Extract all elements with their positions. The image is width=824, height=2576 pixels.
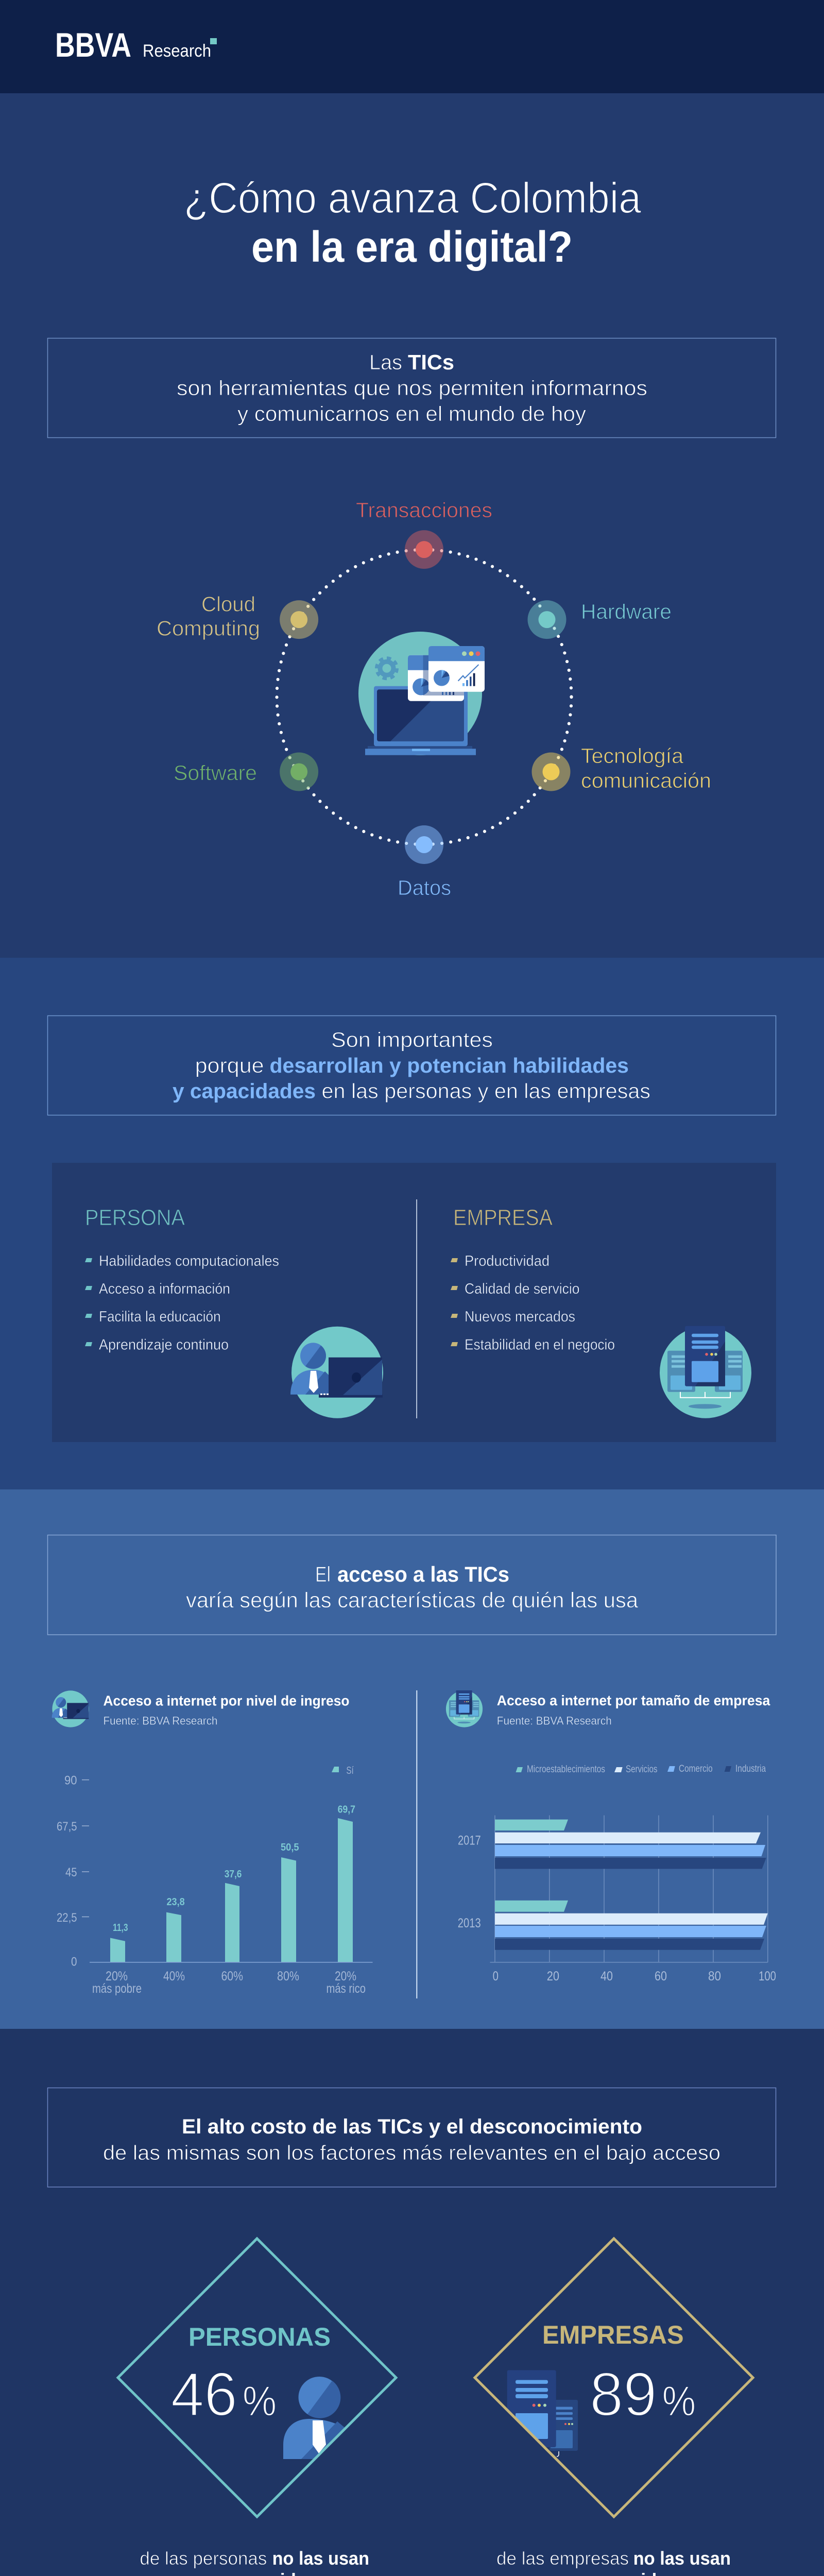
title: ¿Cómo avanza Colombia bbox=[184, 174, 641, 222]
callout: Las TICs: y comunicarnos en el mundo de hoy bbox=[237, 402, 587, 426]
grid bbox=[490, 1816, 768, 1962]
node: Cloud Computing: Cloud bbox=[201, 592, 255, 616]
chart heading bbox=[103, 1693, 349, 1727]
axis labels: 2013 bbox=[458, 1916, 481, 1930]
stat: 46%: 46 bbox=[171, 2360, 237, 2429]
stat: 89% bbox=[590, 2360, 696, 2429]
chart: acceso por nivel de ingreso bbox=[52, 1690, 373, 1996]
section: alto costo bbox=[0, 2029, 824, 2576]
list: empresa bbox=[451, 1205, 615, 1353]
axis labels: 2017 bbox=[458, 1834, 481, 1848]
value labels: 11,3 bbox=[113, 1922, 128, 1934]
axis labels: 20 bbox=[547, 1969, 559, 1984]
chart: acceso por tamaño de empresa bbox=[446, 1690, 776, 1984]
diagram: TIC components ring bbox=[157, 498, 711, 900]
list: persona: Aprendizaje continuo bbox=[99, 1336, 229, 1353]
chart heading: Acceso a internet por tamaño de empresa bbox=[497, 1692, 770, 1708]
list: persona: Habilidades computacionales bbox=[99, 1253, 279, 1269]
list: persona: Facilita la educación bbox=[99, 1309, 221, 1325]
text: empresas: no las usan bbox=[633, 2548, 731, 2569]
logo: BBVA Research: Research bbox=[143, 41, 211, 61]
node: Cloud Computing bbox=[157, 592, 318, 640]
stat: 46% bbox=[171, 2360, 277, 2429]
section: intro TICs bbox=[0, 93, 824, 958]
y axis: 45 bbox=[65, 1866, 77, 1879]
list: persona: Acceso a información bbox=[99, 1281, 230, 1297]
axis labels bbox=[458, 1834, 776, 1984]
y axis: 0 bbox=[71, 1955, 77, 1969]
panel: persona y empresa bbox=[52, 1163, 776, 1442]
list: empresa: Productividad bbox=[465, 1253, 550, 1269]
value labels: 69,7 bbox=[338, 1804, 355, 1815]
stat: 89%: % bbox=[662, 2378, 696, 2425]
node: Cloud Computing: Computing bbox=[157, 617, 260, 640]
callout: alto costo bbox=[47, 2088, 776, 2187]
icon: servidor empresa bbox=[660, 1326, 751, 1418]
legend: Comercio bbox=[679, 1764, 713, 1774]
callout: El acceso a las TICs: varía según las características de quién las usa bbox=[186, 1588, 639, 1612]
list: empresa: Estabilidad en el negocio bbox=[465, 1336, 615, 1353]
icon: persona pequeña bbox=[52, 1690, 89, 1727]
stat: 89%: 89 bbox=[590, 2360, 657, 2429]
node: Datos bbox=[398, 825, 451, 900]
callout: Son importantes: Son importantes bbox=[331, 1028, 493, 1052]
y axis: 22,5 bbox=[57, 1911, 77, 1925]
y axis bbox=[57, 1773, 89, 1969]
diamond bbox=[475, 2239, 753, 2517]
icon: persona con laptop bbox=[290, 1327, 383, 1418]
list: persona bbox=[85, 1205, 279, 1353]
node: Tecnología comunicación: comunicación bbox=[581, 769, 711, 792]
axis labels: 0 bbox=[493, 1969, 499, 1984]
logo: BBVA Research: BBVA bbox=[55, 26, 131, 64]
title: en la era digital? bbox=[251, 223, 573, 271]
list: empresa: Calidad de servicio bbox=[465, 1281, 580, 1297]
node: Software: Software bbox=[174, 761, 257, 785]
node: Transacciones bbox=[356, 498, 492, 569]
x axis labels: 20% bbox=[106, 1969, 128, 1984]
callout: Son importantes: desarrollan y potencian habilidades bbox=[270, 1054, 629, 1077]
y axis: 90 bbox=[64, 1773, 77, 1788]
callout: alto costo: El alto costo de las TICs y el desconocimiento bbox=[182, 2115, 642, 2138]
section: importancia bbox=[0, 958, 824, 1489]
bars 2017 bbox=[495, 1820, 766, 1869]
heading: EMPRESAS: EMPRESAS bbox=[542, 2320, 684, 2349]
node: Tecnología comunicación bbox=[531, 744, 711, 792]
section: acceso a las TICs bbox=[0, 1489, 824, 2029]
text: personas: no las usan bbox=[272, 2548, 369, 2569]
text: empresas bbox=[496, 2548, 731, 2576]
text: empresas: de las empresas bbox=[496, 2548, 629, 2569]
text: personas bbox=[140, 2548, 369, 2576]
header band bbox=[0, 0, 824, 93]
x axis labels: más rico bbox=[327, 1981, 366, 1996]
node: Transacciones: Transacciones bbox=[356, 498, 492, 522]
legend: Servicios bbox=[626, 1764, 657, 1775]
node: Datos: Datos bbox=[398, 876, 451, 900]
icon: servidor pequeño bbox=[446, 1690, 483, 1727]
title bbox=[184, 174, 641, 271]
list: empresa: Nuevos mercados bbox=[465, 1309, 575, 1325]
x axis labels bbox=[92, 1969, 366, 1996]
x axis labels: más pobre bbox=[92, 1981, 142, 1996]
value labels: 23,8 bbox=[167, 1896, 185, 1908]
callout: Las TICs: Las bbox=[369, 350, 402, 374]
x axis labels: 80% bbox=[277, 1969, 299, 1984]
x axis labels: 20% bbox=[335, 1969, 356, 1984]
chart heading: Fuente: BBVA Research bbox=[103, 1715, 217, 1727]
callout: Las TICs bbox=[47, 338, 776, 438]
axis labels: 40 bbox=[600, 1969, 613, 1984]
list: empresa: EMPRESA bbox=[453, 1205, 553, 1230]
callout: El acceso a las TICs: El bbox=[315, 1562, 331, 1586]
node: Hardware bbox=[527, 600, 672, 639]
axis labels: 100 bbox=[759, 1969, 776, 1984]
logo: BBVA Research bbox=[55, 26, 217, 64]
node: Hardware: Hardware bbox=[581, 600, 672, 623]
legend: Sí bbox=[332, 1765, 354, 1776]
callout: Son importantes bbox=[47, 1016, 776, 1115]
stat: 46%: % bbox=[243, 2378, 277, 2425]
value labels bbox=[113, 1804, 355, 1934]
callout: Las TICs: TICs bbox=[408, 350, 454, 374]
icon: persona en rombo bbox=[283, 2377, 347, 2459]
panel: empresas 89% bbox=[475, 2239, 753, 2576]
y axis: 67,5 bbox=[57, 1820, 77, 1834]
callout: Son importantes: en las personas y en las empresas bbox=[321, 1079, 650, 1103]
chart heading: Fuente: BBVA Research bbox=[497, 1714, 612, 1727]
icon: servidores en rombo bbox=[507, 2370, 578, 2456]
legend: Sí: Sí bbox=[346, 1765, 354, 1776]
bars 2013 bbox=[495, 1901, 768, 1950]
bars bbox=[110, 1818, 353, 1962]
node: Software bbox=[174, 752, 318, 791]
callout: alto costo: de las mismas son los factores más relevantes en el bajo acceso bbox=[103, 2142, 720, 2164]
chart heading: Acceso a internet por nivel de ingreso bbox=[103, 1693, 349, 1708]
panel: personas 46% bbox=[118, 2239, 396, 2576]
heading: PERSONAS: PERSONAS bbox=[188, 2323, 331, 2351]
icon: laptop with charts bbox=[358, 632, 485, 755]
callout: Son importantes: y capacidades bbox=[173, 1079, 316, 1103]
callout: El acceso a las TICs: acceso a las TICs bbox=[337, 1562, 509, 1586]
text: personas: de las personas bbox=[140, 2548, 267, 2569]
axis labels: 60 bbox=[655, 1969, 667, 1984]
diamond bbox=[118, 2239, 396, 2517]
axis labels: 80 bbox=[708, 1969, 721, 1984]
x axis labels: 40% bbox=[163, 1969, 185, 1984]
legend: Industria bbox=[735, 1764, 766, 1774]
node: Tecnología comunicación: Tecnología bbox=[581, 744, 683, 768]
legend: Microestablecimientos bbox=[527, 1764, 605, 1775]
list: persona: PERSONA bbox=[85, 1205, 185, 1230]
callout: Las TICs: son herramientas que nos permiten informarnos bbox=[177, 376, 647, 400]
legend bbox=[516, 1764, 766, 1775]
callout: El acceso a las TICs bbox=[47, 1535, 776, 1635]
value labels: 50,5 bbox=[281, 1842, 299, 1853]
chart heading bbox=[497, 1692, 770, 1727]
x axis labels: 60% bbox=[221, 1969, 243, 1984]
value labels: 37,6 bbox=[225, 1869, 242, 1880]
callout: Son importantes: porque bbox=[195, 1054, 264, 1077]
